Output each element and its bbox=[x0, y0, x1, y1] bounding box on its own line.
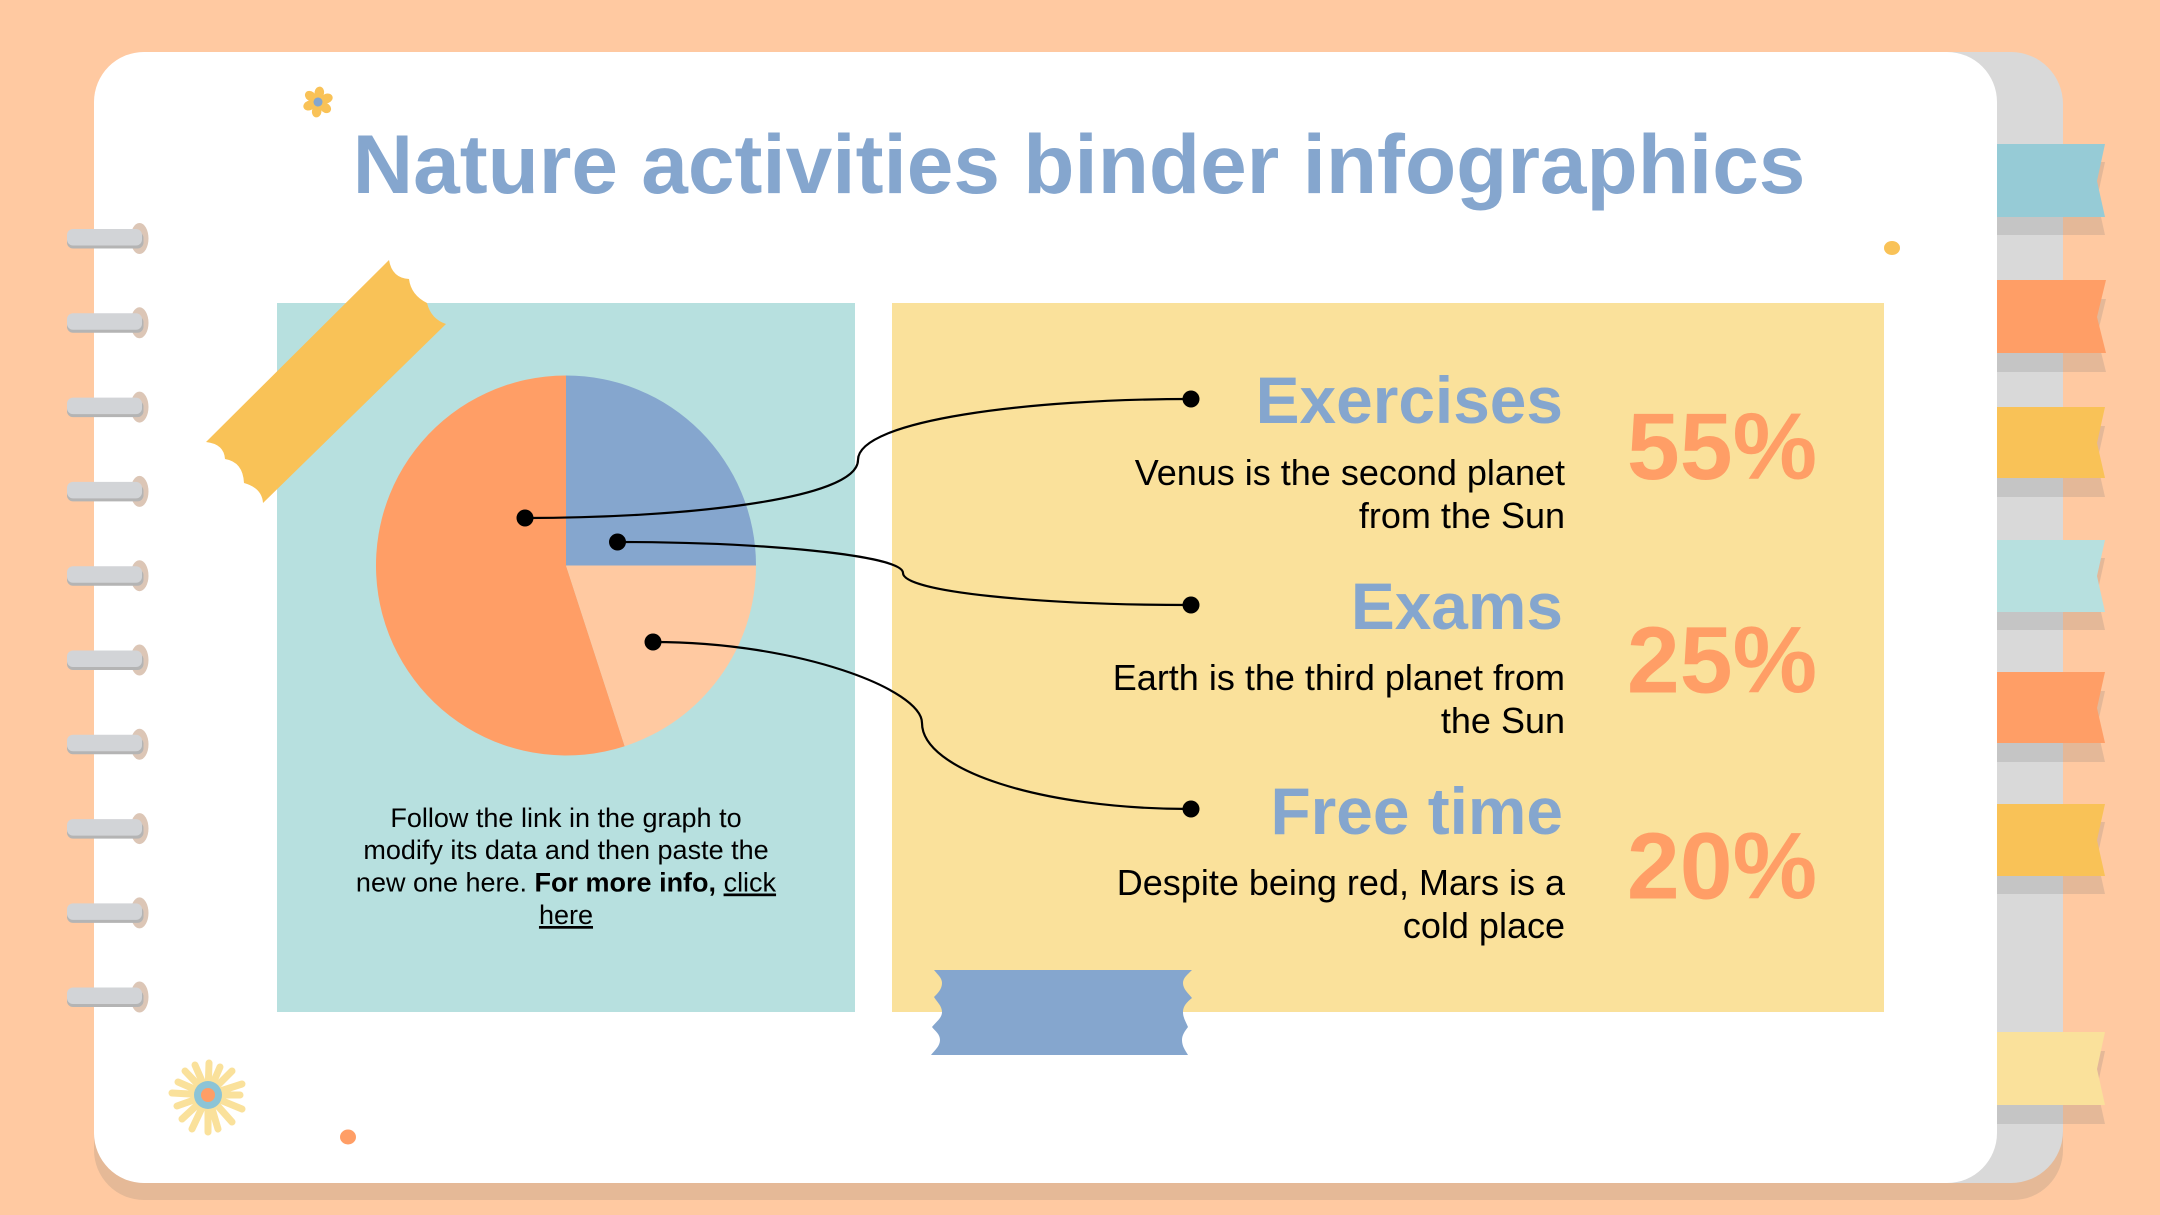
icon: small flower bbox=[300, 84, 336, 120]
spiral rings bbox=[67, 223, 148, 1012]
item: Exams: the Sun bbox=[1441, 700, 1565, 741]
connector: Exercises bbox=[516, 390, 1200, 526]
caption text bbox=[356, 803, 777, 930]
item: Exercises: from the Sun bbox=[1359, 495, 1565, 536]
slice: peach 20% bbox=[566, 566, 756, 746]
icon: sun flower bbox=[172, 1063, 242, 1132]
pie chart bbox=[376, 375, 756, 756]
stat: 55%: 55% bbox=[1627, 394, 1817, 500]
stat: 25%: 25% bbox=[1627, 608, 1817, 714]
caption text: modify its data and then paste the bbox=[363, 835, 769, 865]
decorative dot: orange bbox=[340, 1130, 356, 1144]
item: Exams bbox=[1113, 569, 1565, 741]
item: Exams: Earth is the third planet from bbox=[1113, 657, 1565, 698]
tab: light teal bbox=[1997, 540, 2105, 630]
tab: yellow lower bbox=[1997, 804, 2105, 894]
slice: blue 25% bbox=[566, 376, 756, 566]
decorative dot: yellow bbox=[1884, 241, 1900, 255]
tab: teal bbox=[1997, 144, 2105, 235]
item: Exercises: Exercises bbox=[1256, 363, 1563, 437]
tab: yellow bbox=[1997, 407, 2105, 497]
caption text: Follow the link in the graph to bbox=[390, 803, 742, 833]
caption text: here bbox=[539, 900, 593, 930]
washi tape: yellow bbox=[206, 260, 446, 503]
connector: Free time bbox=[644, 634, 1200, 818]
item: Free time: Despite being red, Mars is a bbox=[1117, 862, 1566, 903]
panel: chart background bbox=[277, 303, 855, 1012]
slice: orange 55% bbox=[376, 375, 625, 756]
item: Free time: Free time bbox=[1270, 774, 1563, 848]
item: Exercises: Venus is the second planet bbox=[1135, 452, 1565, 493]
item: Free time bbox=[1117, 774, 1566, 946]
item: Exams: Exams bbox=[1351, 569, 1563, 643]
tab: orange bbox=[1997, 280, 2106, 372]
title: Nature activities binder infographics bbox=[353, 117, 1805, 211]
connector: Exams bbox=[609, 534, 1200, 614]
stat: 20%: 20% bbox=[1627, 814, 1817, 920]
caption text: new one here. For more info, click bbox=[356, 868, 777, 898]
item: Free time: cold place bbox=[1403, 905, 1565, 946]
tab: orange lower bbox=[1997, 672, 2105, 762]
washi tape: blue bbox=[931, 970, 1192, 1055]
tab: pale yellow bbox=[1997, 1032, 2105, 1124]
index tabs bbox=[1997, 144, 2106, 1124]
item: Exercises bbox=[1135, 363, 1565, 536]
panel: details background bbox=[892, 303, 1884, 1012]
